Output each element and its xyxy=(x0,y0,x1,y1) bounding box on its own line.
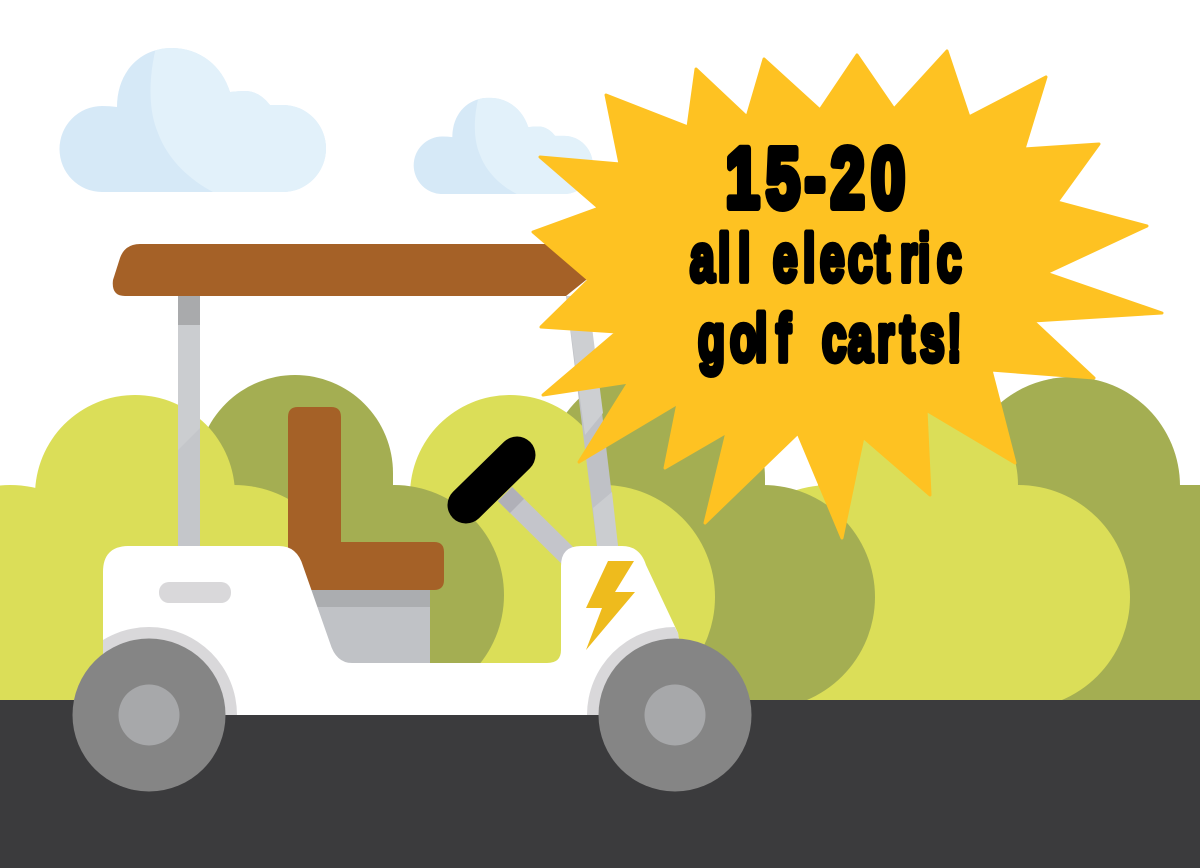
text line: golf carts: golf carts! xyxy=(698,302,962,376)
starburst shape xyxy=(533,51,1162,538)
text line: all electric: all electric xyxy=(690,222,962,296)
body vent xyxy=(159,582,231,603)
front roof post xyxy=(566,296,618,546)
seat xyxy=(288,407,444,590)
rear roof post xyxy=(178,296,200,546)
under-seat panel xyxy=(310,590,430,663)
cart body xyxy=(103,546,690,715)
bushes xyxy=(0,368,1200,709)
road xyxy=(0,700,1200,868)
steering wheel xyxy=(466,455,517,505)
icon: lightning bolt xyxy=(586,561,635,650)
starburst callout xyxy=(533,51,1162,538)
rear wheel xyxy=(72,638,226,792)
front wheel xyxy=(598,638,752,792)
roof xyxy=(113,244,596,296)
golf cart xyxy=(61,244,763,803)
cloud: small xyxy=(414,98,592,194)
steering column xyxy=(505,494,570,558)
front fender xyxy=(587,627,679,715)
headline number: 15-20 xyxy=(726,131,905,225)
cloud: large xyxy=(60,48,326,192)
rear fender xyxy=(103,627,237,715)
